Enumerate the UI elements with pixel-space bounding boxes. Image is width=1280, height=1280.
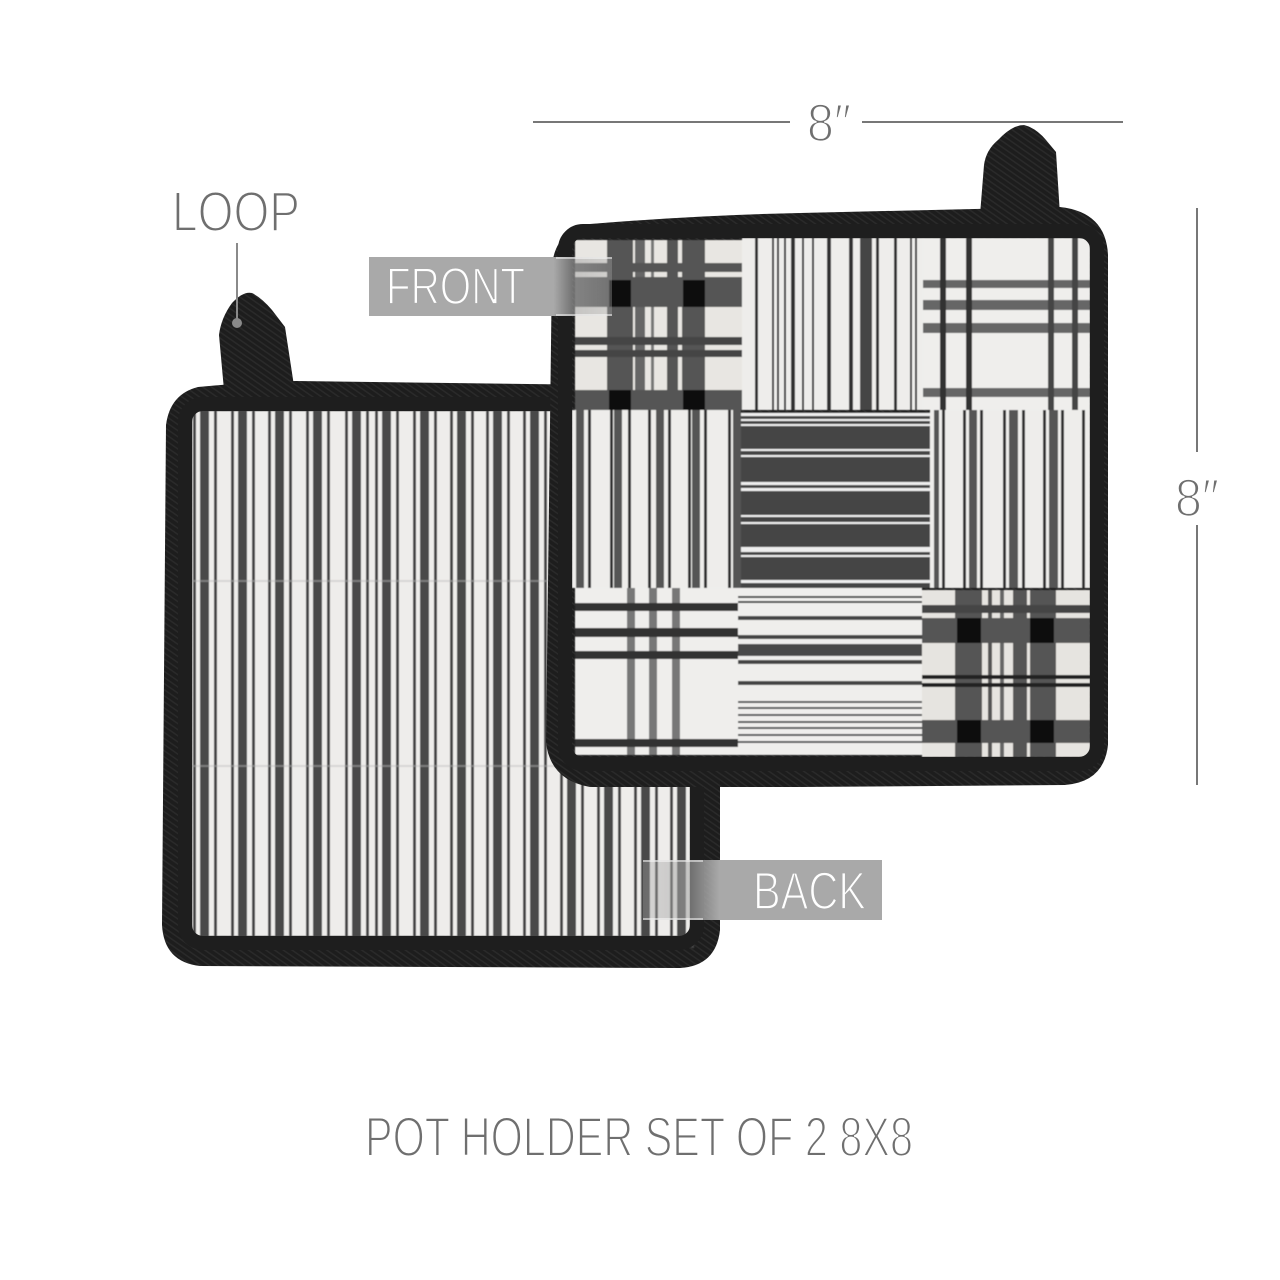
back inner binding edge xyxy=(185,404,697,943)
patch 1: dark plaid xyxy=(574,239,743,411)
patch 9: dark plaid bottom right xyxy=(921,589,1090,757)
patch 7: light plaid bottom left xyxy=(574,587,739,756)
patchwork fabric xyxy=(572,238,1090,757)
patch 2: vertical stripes xyxy=(741,238,924,411)
back striped fabric xyxy=(192,411,694,948)
callout: loop xyxy=(172,180,300,328)
back binding xyxy=(162,381,720,968)
patch 8: horizontal thin stripes xyxy=(737,587,923,756)
front inner binding edge xyxy=(565,231,1097,764)
patch 3: light plaid xyxy=(922,238,1090,411)
panel: front pot holder xyxy=(546,125,1108,787)
patch 4: left vertical stripes xyxy=(572,409,742,589)
patch 5: dark horizontal stripes centre xyxy=(740,412,931,589)
patch 6: right vertical stripes xyxy=(929,409,1090,589)
label: back: BACK xyxy=(753,862,866,921)
title: product name: POT HOLDER SET OF 2 8X8 xyxy=(365,1105,913,1168)
dimension: width 8 inches: 8″ xyxy=(807,94,851,153)
icon: back hanging loop xyxy=(219,293,298,412)
dimension: height 8 inches: 8″ xyxy=(1175,469,1219,528)
panel: back pot holder xyxy=(162,293,720,968)
label: back xyxy=(643,860,882,921)
front binding xyxy=(546,207,1108,787)
callout: loop: LOOP xyxy=(172,180,300,244)
icon: front hanging loop xyxy=(980,125,1060,215)
label: front: FRONT xyxy=(386,258,525,316)
